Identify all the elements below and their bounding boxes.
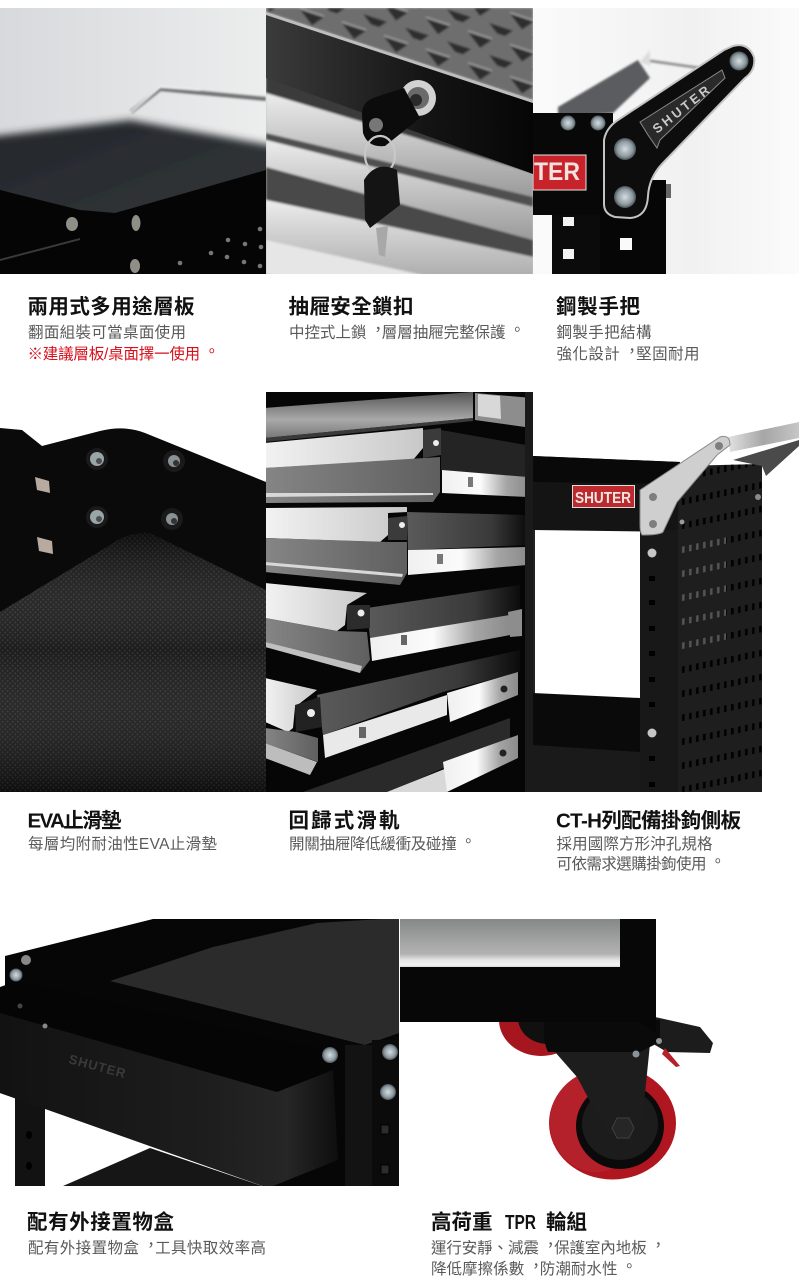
- text: box description: ，: [143, 1238, 159, 1254]
- lower shelf opening: [45, 1108, 150, 1186]
- bracket bolts: [649, 442, 723, 528]
- title: EVA heading: EVA止滑墊: [28, 810, 122, 832]
- post punched holes: [649, 576, 655, 787]
- steel handle bracket: [604, 45, 754, 218]
- box outer face: SHUTER: [67, 1051, 128, 1081]
- upright post: [640, 530, 680, 792]
- lower shelf: [533, 693, 640, 792]
- black cart frame: [400, 919, 656, 1033]
- right post: [345, 1040, 399, 1186]
- drawer metal bands: [266, 78, 533, 274]
- left cabinet edge: [533, 530, 535, 694]
- title: caster heading: 高荷重: [431, 1210, 492, 1234]
- text: shelf description: [28, 324, 220, 363]
- photo: TPR caster wheel: [400, 919, 799, 1186]
- box inner wall: [0, 981, 333, 1092]
- text: caster description: 降低摩擦係數: [431, 1261, 524, 1278]
- photo: drawer safety lock: [266, 8, 533, 274]
- text: shelf description: ※建議層板/桌面擇一使用: [28, 346, 200, 363]
- lower shelf: [63, 1148, 262, 1186]
- text: handle description: 鋼製手把結構: [556, 324, 652, 342]
- title: lock heading: 抽屜安全鎖扣: [288, 294, 414, 318]
- photo: CT-H side pegboard: [533, 392, 799, 792]
- rubber mat: [266, 8, 533, 100]
- text: CT-H description: 。: [710, 854, 726, 870]
- title: slide heading: 回歸式滑軌: [288, 810, 400, 832]
- drawer 1: [265, 428, 528, 503]
- text: caster description: 保護室內地板: [554, 1239, 647, 1257]
- photo: attached storage box: [0, 918, 399, 1188]
- drawer 4: [265, 650, 520, 775]
- front wheel: [549, 1066, 676, 1180]
- tray body: [0, 919, 399, 1186]
- bracket square holes: [35, 477, 53, 554]
- photo: dual-use shelf panel: [0, 8, 286, 274]
- small beam bolts: [560, 116, 606, 130]
- bracket engraved SHUTER: SHUTER: [650, 82, 713, 136]
- title: CT-H heading: CT-H列配備掛鉤側板: [556, 808, 742, 832]
- title: handle heading: 鋼製手把: [556, 296, 640, 318]
- text: caster description: [431, 1238, 666, 1278]
- text: lock description: 中控式上鎖: [289, 324, 366, 342]
- drawer 2: [265, 507, 527, 585]
- EVA mat surface: [0, 533, 266, 792]
- text: caster description: 防潮耐水性: [540, 1260, 617, 1278]
- drawer 5: [303, 718, 518, 792]
- top drawer: [265, 392, 532, 442]
- title: caster heading: TPR: [505, 1211, 536, 1234]
- title: box heading: 配有外接置物盒: [27, 1210, 174, 1234]
- swivel dome: [544, 1020, 660, 1052]
- post bolts: [648, 548, 656, 738]
- text: handle description: 強化設計: [556, 346, 620, 363]
- bracket bolts: [86, 448, 185, 530]
- shelf top surface: [0, 114, 266, 213]
- drawer cabinet edge: [525, 392, 533, 792]
- black frame beam: [533, 113, 613, 215]
- text: box description: 配有外接置物盒: [28, 1240, 139, 1257]
- black tray corner bracket: [0, 428, 266, 620]
- perforation dots: [178, 227, 263, 268]
- title: caster heading: [431, 1210, 587, 1234]
- black posts with square holes: [552, 180, 671, 274]
- bracket engraved SHUTER: [640, 70, 725, 148]
- logo: red SHUTER badge: TER: [534, 158, 580, 186]
- text: caster description: ，: [543, 1238, 558, 1254]
- text: box description: 工具快取效率高: [155, 1239, 266, 1257]
- bolts: [10, 968, 398, 1100]
- side pegboard panel: [678, 464, 762, 792]
- text: handle description: [556, 324, 700, 363]
- photo: EVA anti-slip mat: [0, 392, 266, 792]
- text: CT-H description: 可依需求選購掛鉤使用: [556, 856, 707, 873]
- icon: steel handle: [131, 87, 266, 112]
- text: handle description: ，: [624, 344, 640, 360]
- rubber mat: [110, 918, 399, 1045]
- title: caster heading: 輪組: [546, 1210, 587, 1234]
- black drawer front band: [266, 14, 533, 174]
- text: lock description: 。: [509, 322, 525, 339]
- text: handle description: 堅固耐用: [636, 345, 700, 363]
- icon: lock with key: [362, 80, 436, 257]
- text: caster description: 運行安靜、減震: [431, 1240, 539, 1257]
- back handle: [558, 50, 700, 118]
- text: CT-H description: [556, 835, 726, 873]
- axle nut: [612, 1118, 634, 1138]
- text: CT-H description: 採用國際方形沖孔規格: [556, 835, 713, 853]
- bracket bolts: [614, 52, 748, 208]
- text: shelf description: 翻面組裝可當桌面使用: [28, 324, 186, 342]
- back wheel: [499, 984, 583, 1056]
- silver drawer panel: [400, 919, 620, 969]
- box outer face: [0, 1013, 338, 1188]
- caster fork: [548, 1044, 650, 1141]
- handle bars: [728, 422, 799, 476]
- red brake tip: [662, 1048, 680, 1067]
- text: slide description: 開關抽屜降低緩衝及碰撞: [289, 836, 457, 853]
- title: shelf heading: 兩用式多用途層板: [28, 294, 195, 318]
- small bolts: [632, 1038, 662, 1058]
- shelf side face: [0, 170, 266, 274]
- text: caster description: 。: [621, 1258, 637, 1276]
- text: lock description: 層層抽屜完整保護: [382, 324, 506, 342]
- text: slide description: 。: [460, 834, 476, 850]
- lower post: [15, 1095, 45, 1186]
- small rear bolts: [18, 955, 48, 1028]
- text: EVA description: 每層均附耐油性EVA止滑墊: [28, 835, 217, 853]
- photo: steel handle: [533, 8, 760, 274]
- drawer 3: [265, 583, 522, 673]
- text: caster description: ，: [650, 1238, 666, 1254]
- logo: red SHUTER badge: SHUTER: [575, 490, 631, 507]
- text: lock description: ，: [370, 322, 386, 339]
- text: shelf description: 。: [204, 344, 220, 360]
- top cross beam: [533, 456, 680, 532]
- photo: ball-bearing drawer slides: [265, 392, 533, 792]
- silver handle bracket: [640, 436, 730, 535]
- rivets: [66, 215, 140, 273]
- text: caster description: ，: [528, 1258, 544, 1276]
- brake pedal: [655, 1017, 713, 1053]
